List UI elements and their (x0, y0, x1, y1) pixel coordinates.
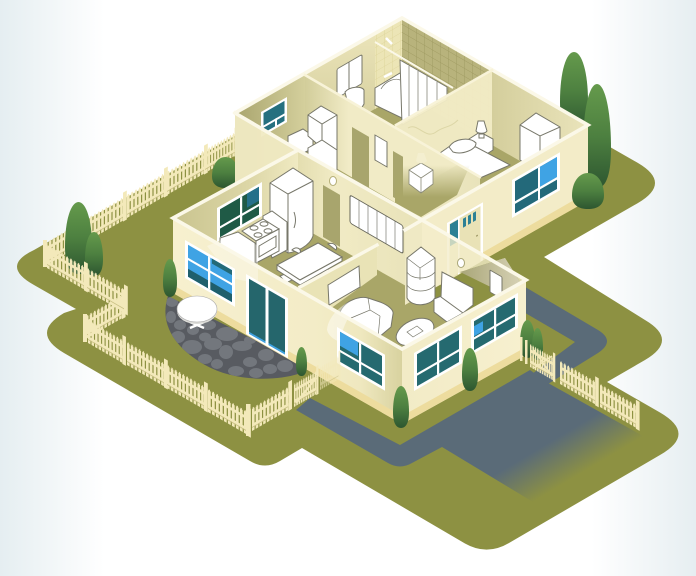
hallway wall (305, 75, 480, 252)
bush at bedroom corner (572, 173, 604, 209)
small wall door (490, 270, 502, 299)
tree: back-left small (85, 232, 103, 276)
laundry window (261, 97, 287, 137)
tree behind right gate (520, 320, 535, 358)
corner bookcase (407, 247, 435, 305)
bedroom back wall (492, 70, 588, 200)
lamp (476, 121, 487, 138)
counter (220, 232, 255, 275)
kitchen appliances (220, 168, 342, 285)
sofa (340, 298, 393, 341)
bedroom window (512, 152, 560, 218)
hall second door recess (393, 151, 403, 203)
bath and bedroom partition (396, 70, 492, 200)
toilet (345, 87, 364, 110)
wall tops (173, 18, 588, 349)
nightstand (469, 132, 493, 157)
bathtub (375, 73, 406, 120)
house floor (173, 93, 588, 424)
shaded floor through wall (460, 258, 520, 293)
tree by blue window (163, 259, 177, 297)
dining table (277, 243, 342, 285)
jog wall (405, 220, 422, 305)
wall base band (440, 192, 588, 285)
bedroom furniture (440, 113, 560, 178)
back fence (45, 126, 238, 267)
interior partition wall (300, 245, 377, 320)
side cabinet (263, 211, 287, 258)
sofa ghost over wall (327, 298, 365, 346)
front blue window (185, 240, 235, 307)
hall picture (375, 135, 387, 167)
hall door recess (352, 127, 369, 189)
driveway (296, 370, 650, 505)
laundry back wall (235, 75, 305, 188)
living side window (337, 327, 385, 391)
kitchen back wall (173, 150, 298, 293)
television (441, 272, 473, 313)
house (173, 18, 588, 424)
kitchen doorway recess (323, 185, 340, 247)
mirror cabinet (337, 55, 362, 98)
back road (515, 281, 607, 384)
tall cabinet (308, 106, 337, 152)
bed (440, 146, 510, 178)
bathroom fixtures (337, 38, 453, 125)
front right base band (402, 347, 526, 424)
front left base band (173, 285, 402, 424)
kitchen counter ghost over wall (207, 233, 258, 284)
shower head (384, 38, 392, 77)
stove (242, 219, 279, 263)
living room furniture (340, 247, 473, 351)
right gate fence (520, 337, 640, 431)
hall nightstand (409, 153, 433, 193)
front right exterior wall (402, 280, 526, 424)
hall floor (395, 165, 470, 217)
kitchen window (217, 182, 262, 242)
wall lamp (458, 258, 464, 268)
laundry furniture (288, 106, 337, 176)
sliding door (246, 274, 288, 358)
sink unit (308, 140, 337, 176)
tree: right second (583, 84, 611, 188)
front left fence (88, 315, 251, 438)
bathroom back wall (305, 18, 402, 150)
bush behind kitchen (212, 157, 239, 188)
wardrobe (520, 113, 560, 172)
front window two (471, 293, 518, 355)
lawn edge band (488, 200, 582, 255)
front window one (414, 325, 462, 391)
kitchen right wall (298, 150, 422, 295)
living wall with door ghost (422, 220, 526, 295)
pillow (449, 139, 476, 153)
curtain rod (375, 42, 453, 88)
pale tile section (375, 18, 402, 109)
kitchen and living floor (173, 225, 526, 424)
wall cabinets (350, 195, 403, 254)
curtain ghost (408, 120, 458, 134)
refrigerator (270, 168, 313, 253)
tree at front corner (393, 386, 409, 428)
wall clock (330, 176, 336, 186)
media stand (434, 295, 463, 322)
patio gate fence (252, 350, 340, 432)
upper left exterior wall (235, 113, 298, 225)
zigzag fence (43, 240, 128, 342)
tree: back-left large (65, 202, 92, 274)
front right exterior wall of bedroom (422, 125, 588, 295)
patio table (177, 296, 217, 328)
tree between windows (462, 348, 478, 391)
entry door (447, 202, 483, 282)
patio (165, 296, 298, 379)
front left exterior wall (173, 218, 402, 424)
tree by sliding door (296, 347, 307, 376)
shower curtain (400, 60, 447, 125)
tree: right tall (560, 52, 588, 132)
tiled shower wall (402, 18, 492, 145)
tree behind right gate small (532, 328, 543, 360)
wall mounted screen (328, 266, 360, 305)
coffee table (392, 313, 438, 351)
washer (288, 129, 313, 155)
